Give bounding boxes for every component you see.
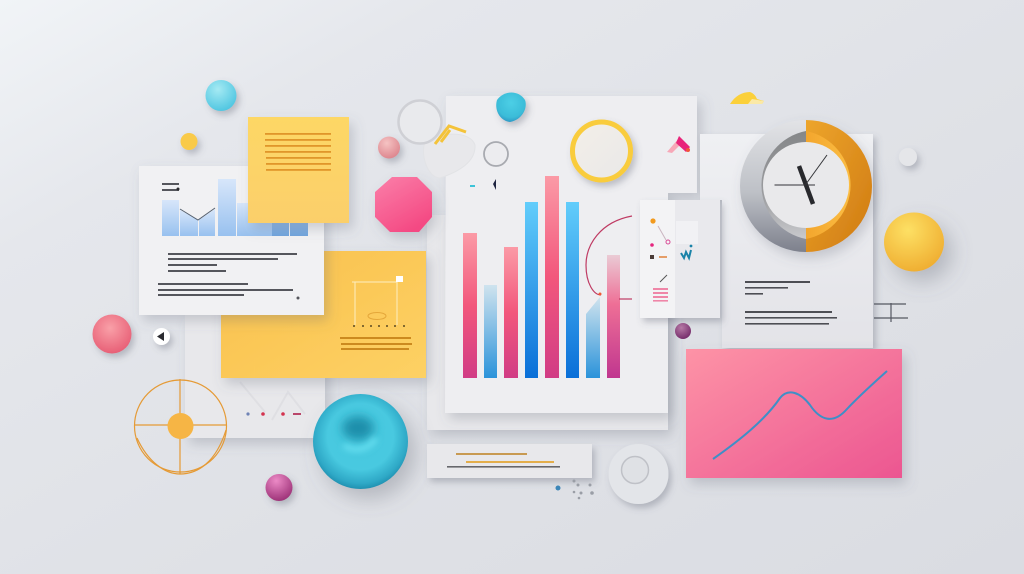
icon: speaker button bbox=[153, 328, 170, 345]
panel: outer back sheet bbox=[427, 215, 668, 430]
sparkline marks bbox=[240, 382, 305, 420]
sphere: pale grey bbox=[899, 148, 917, 166]
panel: small legend card bbox=[640, 200, 720, 318]
sphere: small purple bbox=[675, 323, 691, 339]
icon: yellow ring bbox=[572, 122, 630, 180]
text lines: strip bbox=[447, 453, 560, 468]
panel: lower left white sheet bbox=[185, 315, 325, 438]
panel: right document bbox=[700, 134, 873, 348]
panel: bottom note strip bbox=[427, 444, 592, 478]
sphere: yellow bbox=[884, 212, 944, 272]
sphere: cyan top bbox=[206, 80, 236, 111]
clock hands bbox=[774, 155, 827, 204]
sphere: coral bbox=[92, 314, 132, 354]
icon: orange target wheel bbox=[134, 379, 227, 474]
mini legend bbox=[162, 183, 180, 191]
icon: gold blob bbox=[730, 92, 764, 104]
ornaments: rings and clip bbox=[398, 100, 508, 190]
mini bar chart bbox=[162, 179, 308, 236]
bar chart bbox=[463, 176, 620, 378]
icon: white dish ring bbox=[608, 444, 668, 504]
panel: white chart card bbox=[139, 166, 324, 315]
clock bbox=[740, 120, 872, 252]
legend glyphs bbox=[650, 218, 692, 302]
icon: pink octagon bbox=[375, 177, 432, 232]
text lines: yellow card bbox=[340, 337, 412, 350]
panel: large yellow card bbox=[221, 251, 426, 378]
clock face bbox=[763, 142, 849, 228]
text lines: sticky note bbox=[265, 133, 331, 171]
panel: tall back page bbox=[445, 96, 697, 413]
panel: yellow sticky note bbox=[248, 117, 349, 223]
text lines: right document bbox=[745, 281, 837, 325]
sphere: rose bbox=[378, 136, 400, 158]
icon: small grid mark bbox=[874, 303, 908, 322]
scattered dots bbox=[556, 480, 594, 499]
donut: cyan torus bbox=[313, 394, 408, 489]
trend arc bbox=[586, 216, 632, 299]
line chart bbox=[713, 371, 887, 459]
panel: pink line chart card bbox=[686, 349, 902, 478]
icon: cyan half sphere bbox=[496, 92, 526, 122]
mini chart on yellow card bbox=[352, 276, 405, 327]
sphere: magenta bbox=[266, 474, 292, 501]
text lines: white card bbox=[158, 253, 300, 300]
icon: pink flag bbox=[667, 136, 690, 153]
sphere: small yellow bbox=[180, 133, 198, 150]
